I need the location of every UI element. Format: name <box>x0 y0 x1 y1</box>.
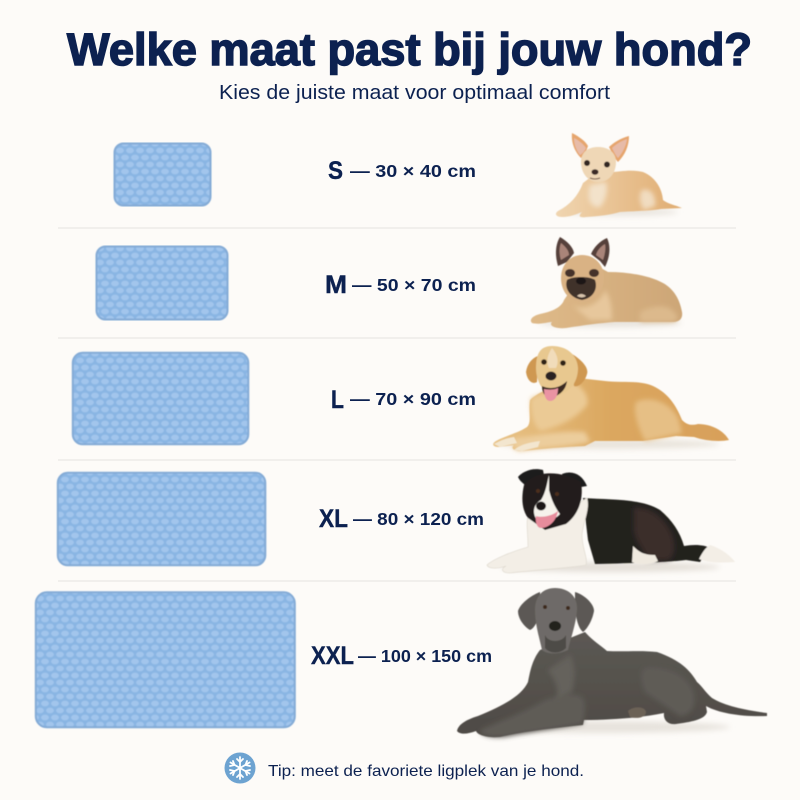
tip text: Tip: meet de favoriete ligplek van je hond. <box>268 763 584 780</box>
mat XL <box>58 473 265 565</box>
size label S: S <box>328 157 343 185</box>
size label XXL: — 100 × 150 cm <box>358 646 492 666</box>
title: Welke maat past bij jouw hond? <box>67 24 752 75</box>
size label XXL <box>311 642 492 670</box>
size label M: — 50 × 70 cm <box>352 275 476 295</box>
dog: golden retriever <box>493 346 729 451</box>
subtitle: Kies de juiste maat voor optimaal comfort <box>219 82 610 104</box>
tip <box>224 752 584 784</box>
size label XL: — 80 × 120 cm <box>353 509 484 529</box>
mat M <box>96 246 228 320</box>
size row XL <box>58 469 735 573</box>
size label L: L <box>331 386 344 414</box>
mat S <box>114 144 210 206</box>
dog: chihuahua <box>556 133 682 217</box>
size row L <box>73 346 729 451</box>
size label XL: XL <box>319 505 348 533</box>
size row M <box>96 237 682 328</box>
size label XL <box>319 505 484 533</box>
size row XXL <box>36 588 767 737</box>
dog: great dane <box>457 588 767 737</box>
size label XXL: XXL <box>311 642 354 670</box>
size row S <box>114 133 682 217</box>
size label S: — 30 × 40 cm <box>350 161 476 181</box>
dog: French bulldog <box>531 237 682 328</box>
size label L <box>331 386 476 414</box>
size label S <box>328 157 476 185</box>
dog: border collie <box>487 469 735 573</box>
mat XXL <box>36 592 295 727</box>
size label L: — 70 × 90 cm <box>350 389 476 409</box>
size label M: M <box>325 271 347 299</box>
size label M <box>325 271 476 299</box>
icon: snowflake <box>224 752 256 784</box>
mat L <box>73 353 248 444</box>
